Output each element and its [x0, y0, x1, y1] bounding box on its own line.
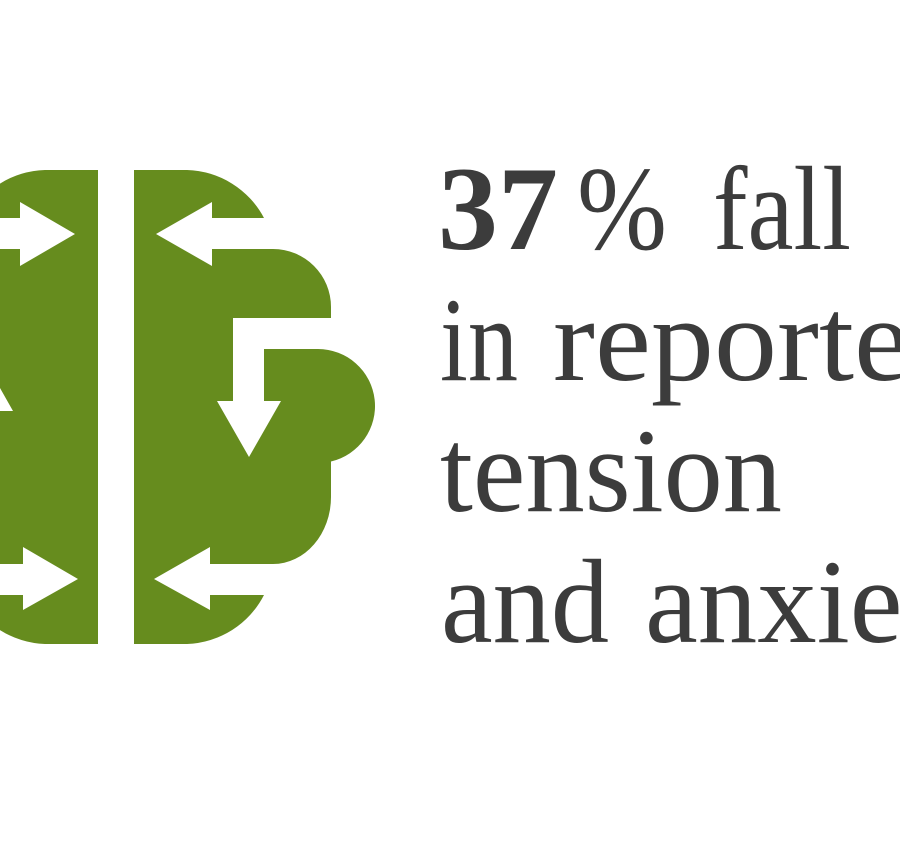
text: 37 percent fall: %	[577, 142, 667, 275]
text: and anxiety: and	[441, 535, 609, 668]
text: 37 percent fall	[438, 142, 851, 275]
text: 37 percent fall: 37	[438, 142, 558, 275]
icon: left brain hemisphere, cropped at page edge	[0, 170, 98, 644]
text: and anxiety	[441, 535, 900, 668]
text: in reported: in	[440, 273, 518, 406]
text: 37 percent fall: fall	[713, 142, 851, 275]
heading: statistic text	[438, 142, 900, 668]
icon: right brain hemisphere with inward arrows	[134, 170, 375, 644]
text: tension: tension	[440, 404, 782, 537]
icon: brain with arrows	[0, 170, 375, 644]
